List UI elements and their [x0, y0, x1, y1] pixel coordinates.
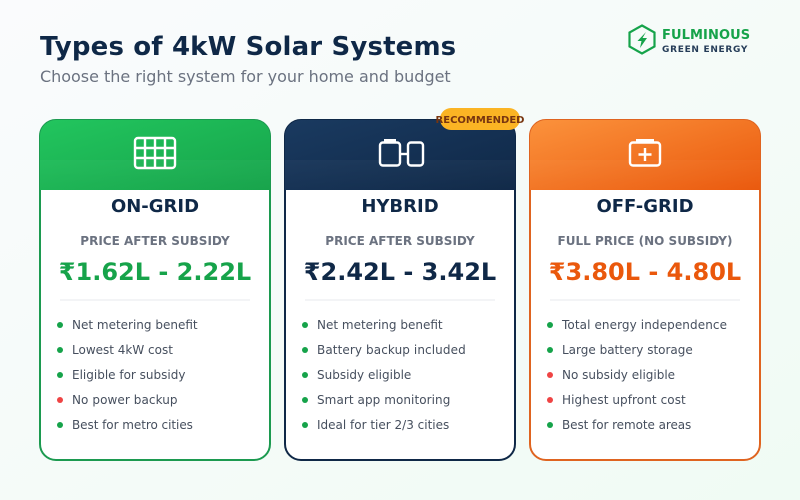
feature list: No power backup [72, 393, 178, 407]
feature list: Net metering benefit [72, 318, 198, 332]
icon: battery plus [630, 139, 660, 166]
badge: recommended: RECOMMENDED [436, 115, 524, 126]
feature list: Best for remote areas [562, 418, 691, 432]
price: ₹3.80L - 4.80L [549, 258, 741, 286]
feature list: Large battery storage [562, 343, 693, 357]
feature list: Subsidy eligible [317, 368, 411, 382]
feature list: Net metering benefit [317, 318, 443, 332]
feature list: Best for metro cities [72, 418, 193, 432]
card title: ON-GRID [111, 196, 199, 217]
icon: solar panel grid [135, 138, 175, 168]
icon: hexagon bolt [630, 26, 654, 54]
price label: FULL PRICE (NO SUBSIDY) [558, 234, 732, 248]
subtitle: Choose the right system for your home and budget [40, 67, 451, 86]
feature list [302, 318, 466, 432]
logo name: FULMINOUS [662, 28, 750, 43]
panel: hybrid [285, 108, 524, 460]
icon: battery and inverter [380, 139, 423, 166]
card title: OFF-GRID [596, 196, 694, 217]
logo: Fulminous Green Energy [630, 26, 750, 55]
feature list: Smart app monitoring [317, 393, 450, 407]
feature list: Highest upfront cost [562, 393, 686, 407]
price: ₹1.62L - 2.22L [59, 258, 251, 286]
feature list: Total energy independence [561, 318, 727, 332]
badge: recommended [436, 108, 524, 130]
price label: PRICE AFTER SUBSIDY [80, 234, 230, 248]
feature list [547, 318, 727, 432]
panel header: off-grid [530, 120, 760, 190]
feature list: No subsidy eligible [562, 368, 675, 382]
panel header: hybrid [285, 120, 515, 190]
feature list: Ideal for tier 2/3 cities [317, 418, 449, 432]
feature list: Battery backup included [317, 343, 466, 357]
panel header: on-grid [40, 120, 270, 190]
feature list: Eligible for subsidy [72, 368, 185, 382]
feature list: Lowest 4kW cost [72, 343, 173, 357]
price: ₹2.42L - 3.42L [304, 258, 496, 286]
title: Types of 4kW Solar Systems [40, 32, 456, 62]
price label: PRICE AFTER SUBSIDY [325, 234, 475, 248]
feature list [57, 318, 198, 432]
panel: on-grid [40, 120, 270, 460]
logo tagline: GREEN ENERGY [662, 45, 748, 55]
panel: off-grid [530, 120, 760, 460]
card title: HYBRID [361, 196, 439, 217]
